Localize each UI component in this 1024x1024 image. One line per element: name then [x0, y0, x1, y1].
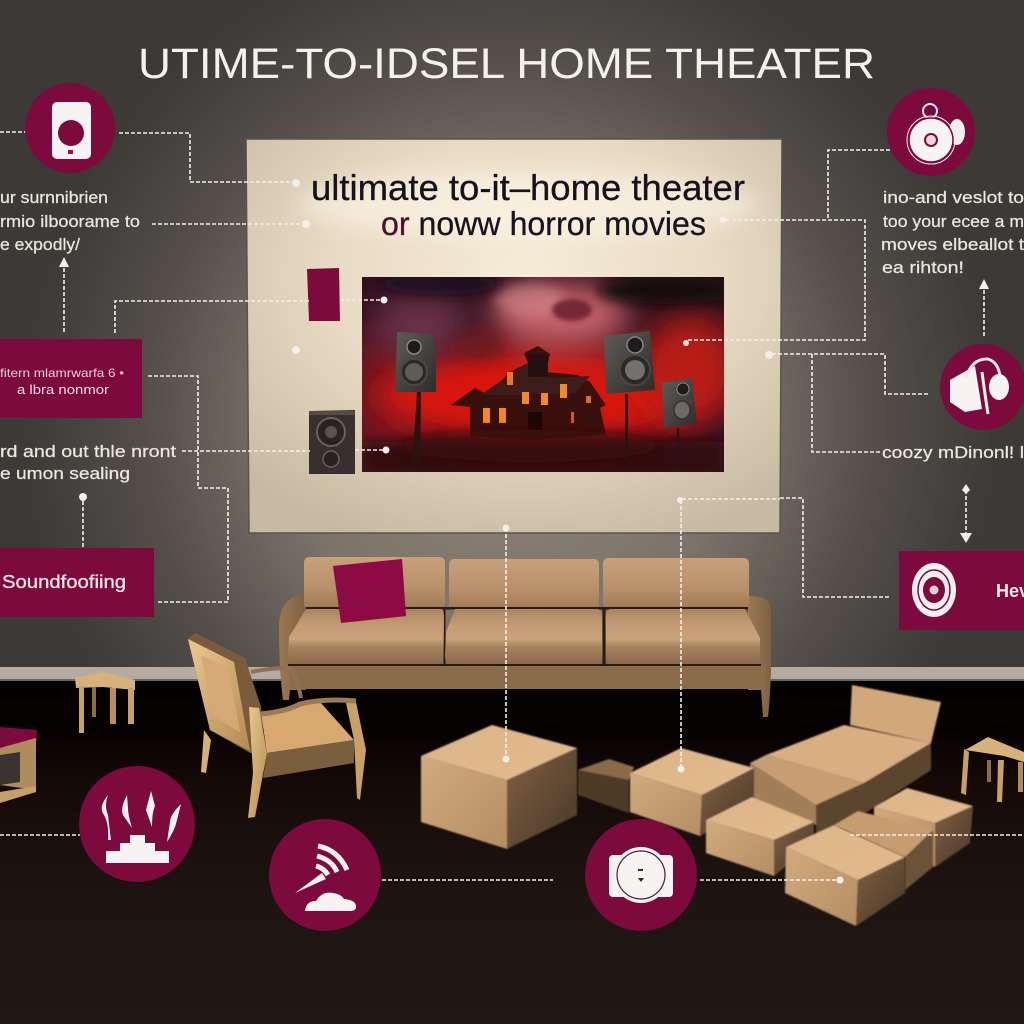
- chaise lounge: [750, 685, 941, 840]
- panel: central poster: [246, 139, 782, 533]
- icon circle: dial: [585, 819, 697, 931]
- right stool: [961, 737, 1024, 802]
- chair seat: [261, 702, 354, 753]
- connector dots: [30, 128, 844, 884]
- text block: top right: [881, 188, 1024, 277]
- left stool: [75, 672, 135, 733]
- main title: UTIME-TO-IDSEL HOME THEATER: [138, 40, 875, 88]
- text block: left middle: [0, 442, 176, 483]
- banner text: fitern mlamrwarfa 6 •: [0, 366, 124, 380]
- text block: left middle: e umon sealing: [0, 464, 130, 483]
- panel: maroon banner right: [899, 551, 1024, 630]
- ottoman cube front right: [785, 825, 905, 926]
- wooden armchair: [188, 633, 366, 818]
- icon circle: signal and cloud: [269, 819, 381, 931]
- dark wooden floor: [0, 681, 1024, 1024]
- sofa seat cushions: [288, 609, 760, 664]
- text block: left middle: rd and out thle nront: [0, 442, 176, 461]
- icon circle: speaker right middle: [940, 344, 1024, 430]
- chair legs and arm: [248, 700, 366, 818]
- horror movie screen: [362, 277, 724, 472]
- banner text: a lbra nonmor: [17, 382, 110, 397]
- poster heading: ultimate to-it–home theater: [311, 167, 745, 208]
- sofa base: [290, 664, 765, 689]
- small dark block: [578, 759, 634, 813]
- icon circle: heat and steam: [79, 766, 195, 882]
- ottoman cube large: [421, 725, 577, 849]
- banner text: [0, 366, 124, 397]
- text block: top right: too your ecee a m: [883, 212, 1024, 231]
- icon circle: speaker top left: [25, 83, 115, 173]
- text block: top left: e expodly/: [0, 235, 80, 254]
- sofa back cushions: [304, 557, 749, 610]
- text block: top right: moves elbeallot t: [881, 235, 1024, 254]
- text block: top right: ea rihton!: [882, 258, 964, 277]
- icon circle: speaker top right: [887, 88, 975, 176]
- sofa shadow gaps: [288, 607, 761, 666]
- small wooden box with maroon top: [0, 727, 37, 803]
- chair backrest: [188, 633, 265, 753]
- icon: record disc: [912, 563, 956, 617]
- room wall background: [0, 0, 1024, 672]
- right stand speaker: [604, 331, 655, 460]
- text block: top left: ur surnnibrien: [0, 188, 108, 207]
- arrow: up left lower: [79, 493, 87, 547]
- maroon poster tag: [307, 268, 340, 321]
- poster speaker: [309, 410, 355, 474]
- storm clouds: [362, 277, 724, 472]
- arrow: up right: [979, 279, 989, 336]
- panel: soundproofing banner: [0, 548, 154, 617]
- dashed connector lines: [0, 132, 1024, 880]
- poster heading: [298, 167, 758, 242]
- arrow: double right: [960, 484, 972, 543]
- poster heading: or noww horror movies: [381, 205, 706, 242]
- small stand speaker: [662, 378, 697, 468]
- sofa arm rests: [279, 594, 771, 717]
- haunted house: [405, 346, 653, 446]
- text: cozy label: coozy mDinonl! l: [882, 443, 1024, 462]
- panel: maroon banner left: [0, 339, 142, 418]
- maroon pillow: [333, 559, 406, 623]
- sofa: [279, 557, 771, 717]
- ottoman cube front middle: [706, 797, 814, 876]
- ottoman cube rear middle: [834, 811, 933, 890]
- chair apron: [263, 740, 354, 778]
- text block: top right: ino-and veslot to: [883, 188, 1024, 207]
- ottoman cube centre: [630, 748, 754, 836]
- arrow: up left upper: [59, 257, 69, 332]
- chair back leg and left arm: [201, 668, 301, 773]
- left stand speaker: [395, 332, 436, 470]
- text block: top left: [0, 188, 140, 254]
- panel: soundproofing banner: Soundfoofiing: [2, 572, 126, 592]
- text block: top left: rmio ilboorame to: [0, 212, 140, 231]
- baseboard: [0, 667, 1024, 681]
- ottoman cube rear right: [874, 788, 973, 867]
